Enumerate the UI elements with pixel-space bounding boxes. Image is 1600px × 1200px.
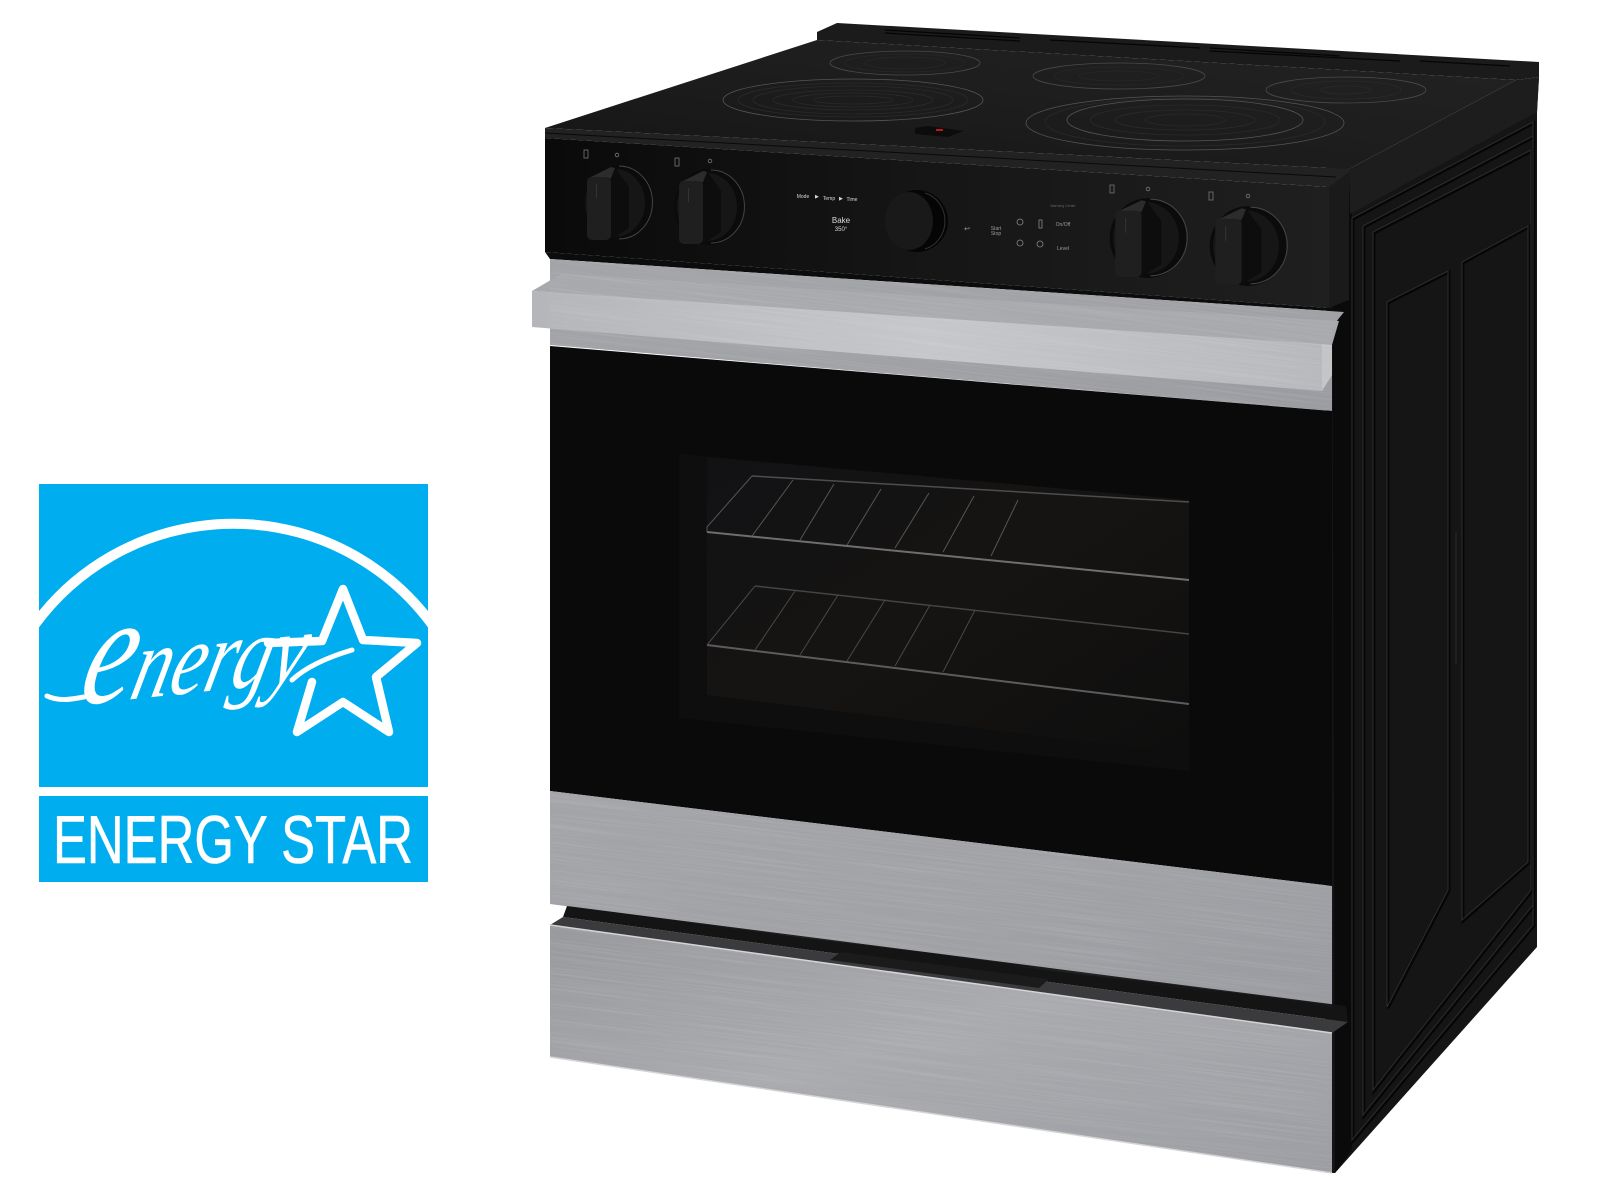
- display text: ▶: [815, 194, 819, 200]
- control panel: [545, 128, 1349, 312]
- logo name panel: [39, 796, 428, 882]
- logo arc: [29, 524, 438, 633]
- door glass: [550, 346, 1332, 886]
- burner rear center: [1033, 63, 1205, 89]
- control labels: [964, 204, 1077, 252]
- drawer front: [550, 925, 1332, 1173]
- energy star logo: [29, 484, 438, 882]
- display text: Temp: [823, 196, 835, 202]
- burner rear left: [830, 51, 980, 75]
- knob 2: [674, 169, 744, 245]
- burner rear right: [1266, 77, 1426, 103]
- burner front left: [723, 79, 983, 121]
- display text: Mode: [797, 194, 809, 200]
- center indicator: [915, 126, 964, 137]
- lower rack: [707, 586, 1189, 704]
- control labels: Warming Center: [1050, 204, 1077, 208]
- knob 1: [582, 165, 652, 241]
- knob 4: [1210, 206, 1287, 286]
- cooktop: [545, 23, 1539, 169]
- star outline: [268, 589, 417, 732]
- oven window: [679, 454, 1189, 771]
- side panel: [1326, 77, 1539, 1173]
- center dial: [885, 190, 948, 252]
- door frame band: [550, 259, 1344, 411]
- knob icons: [584, 150, 1250, 200]
- drawer: [550, 906, 1348, 1173]
- control labels: ↩: [964, 226, 970, 233]
- lower door panel: [550, 791, 1332, 1008]
- knob 3: [1110, 198, 1187, 278]
- script wordmark: energy: [68, 543, 335, 739]
- electric range: [532, 23, 1539, 1174]
- display text: Time: [847, 197, 858, 203]
- drawer notch: [830, 952, 1049, 988]
- drawer lip: [550, 917, 1348, 1033]
- display text: Bake: [832, 216, 851, 225]
- display text: [797, 194, 858, 233]
- glass surface: [545, 40, 1516, 169]
- logo upper panel: [39, 484, 428, 787]
- upper rack: [707, 476, 1189, 580]
- drawer gap: [563, 906, 1348, 1022]
- burner front right: [1026, 96, 1344, 150]
- control labels: On/Off: [1056, 222, 1071, 228]
- display text: ▶: [839, 196, 843, 202]
- handle end cap: [1322, 344, 1332, 391]
- back rail: [817, 23, 1539, 80]
- logo name: ENERGY STAR: [53, 802, 413, 878]
- control labels: Level: [1057, 246, 1069, 252]
- handle top face: [532, 274, 1339, 345]
- handle front face: [532, 291, 1322, 391]
- brushed steel texture: [550, 283, 1332, 1127]
- control labels: Stop: [991, 231, 1001, 237]
- oven door: [532, 259, 1344, 1008]
- drawer highlight: [550, 925, 1332, 1173]
- display text: 350°: [835, 227, 848, 233]
- script swashes: [47, 650, 352, 700]
- control labels: Start: [991, 226, 1002, 232]
